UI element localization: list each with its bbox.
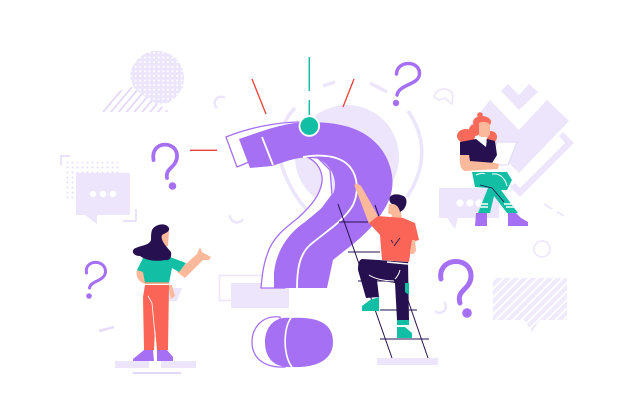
small decorative shapes — [99, 89, 564, 331]
red rays — [190, 79, 354, 150]
left speech bubble with dots — [61, 156, 136, 224]
woman standing — [115, 224, 211, 373]
backing rectangles — [220, 276, 438, 365]
hatched speech bubble — [493, 278, 567, 332]
diamond decoration — [470, 84, 574, 197]
question mark: lower left — [86, 262, 106, 299]
question mark: left — [153, 145, 177, 190]
small question marks — [86, 64, 472, 318]
woman seated with tablet — [457, 112, 528, 226]
lavender disc and ring behind question mark — [279, 82, 422, 215]
question mark dot — [252, 317, 333, 367]
question mark: lower right — [441, 261, 472, 318]
ladder — [338, 204, 429, 358]
dotted circle decoration — [99, 51, 184, 112]
man on ladder — [355, 184, 419, 338]
speech bubble behind seated woman — [439, 188, 499, 229]
big question mark — [226, 122, 393, 288]
teal pin — [300, 57, 319, 136]
question mark: top — [393, 64, 420, 106]
tablet — [490, 142, 517, 165]
